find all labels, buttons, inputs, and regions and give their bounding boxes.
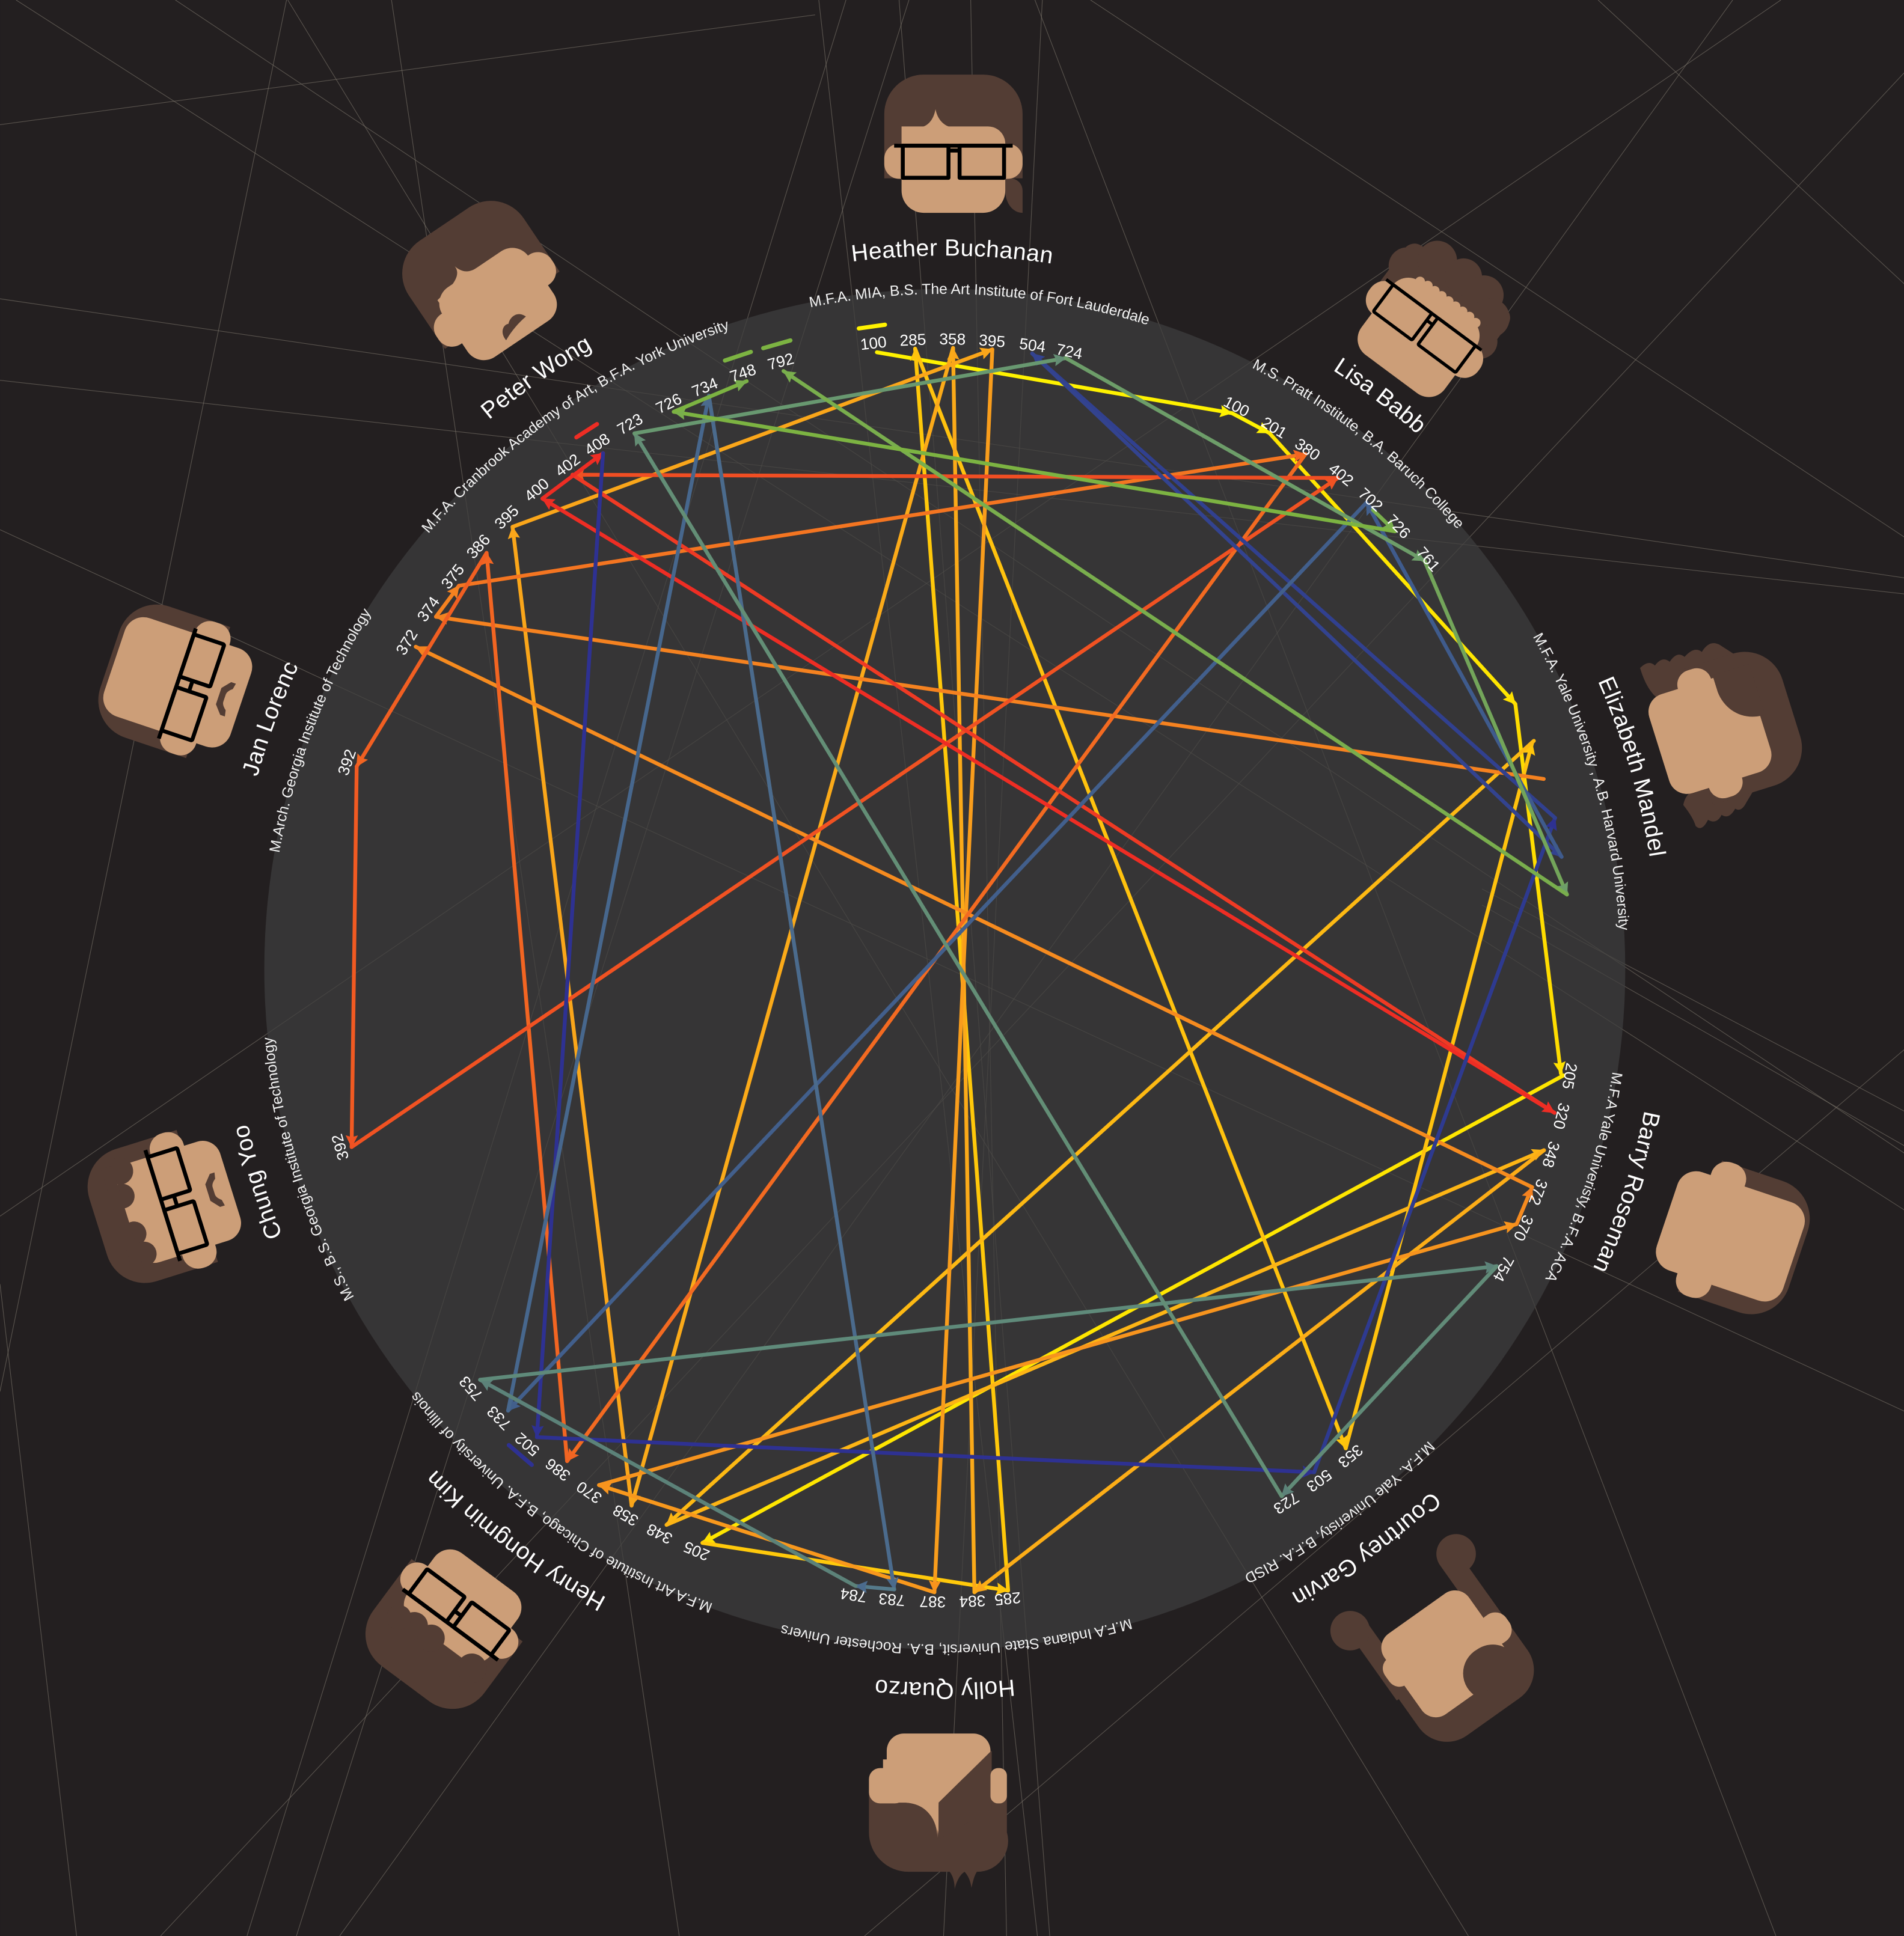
arrow: 702 to 733: [508, 502, 1367, 1411]
arrow: 392 to 402: [352, 478, 1338, 1147]
name: Jan: Jan Lorenc: [243, 662, 297, 775]
arrow: 392 to 392: [352, 766, 357, 1147]
network of course arrows: [352, 348, 1567, 1592]
dash: navy: [509, 1445, 532, 1465]
portrait: Henry Hongmin Kim: [350, 1531, 543, 1724]
arrow: 205 to 205: [702, 1075, 1564, 1543]
arrow: 374 to 375: [436, 586, 459, 617]
arrow: 358 to 395: [513, 527, 632, 1506]
arrow: 761 to 761: [1425, 561, 1567, 894]
name: Elizabeth: Elizabeth Mandel: [1599, 676, 1667, 856]
course numbers: 792: [766, 349, 796, 374]
arrow: 100 to 100: [877, 352, 1232, 413]
course numbers: 748: [727, 360, 758, 386]
arrow: 504 to 702: [1367, 502, 1562, 857]
course numbers: 784: [839, 1584, 868, 1606]
portrait: Holly Quarzo: [869, 1733, 1008, 1889]
degree: Heather: M.F.A. MIA, B.S. The Art Institute of Fort Lauderdale: [809, 283, 1149, 325]
arrow: 702 to 726: [1373, 510, 1395, 531]
course numbers: 370: [573, 1477, 605, 1507]
course numbers: 726: [1383, 511, 1414, 542]
arrow: 201 to 205: [1516, 704, 1561, 1073]
arrow: 387 to 370: [599, 1485, 934, 1592]
course numbers: 285: [994, 1589, 1021, 1609]
degree: Jan: M.Arch. Georgia Institute of Technology: [269, 608, 372, 852]
arrow: 408 to 502: [537, 453, 603, 1437]
degree: Peter: M.F.A. Cranbrook Academy of Art, B.F.A. York University: [421, 322, 727, 533]
course numbers: 100: [859, 332, 887, 353]
arrow: 370 to 370: [599, 1224, 1517, 1485]
arrow: 375 to 380: [459, 454, 1306, 586]
arrow: 370 to 372: [1517, 1187, 1532, 1224]
arrow: 761 to 792: [783, 371, 1567, 894]
course numbers: 372: [1525, 1177, 1551, 1208]
arrow: 374 to 374: [436, 617, 1544, 779]
course numbers: [328, 330, 1581, 1611]
portrait: Elizabeth Mandel: [1639, 642, 1812, 828]
course numbers: 723: [614, 410, 646, 438]
course numbers: 400: [521, 474, 553, 505]
arrow: 402 to 402: [572, 475, 1338, 478]
arrow: 726 to 748: [674, 381, 747, 412]
arrow: 784 to 753: [480, 1380, 856, 1586]
arrow: 753 to 754: [480, 1266, 1497, 1380]
degree labels: [223, 249, 1674, 1657]
arrow: 783 to 784: [856, 1586, 894, 1589]
degree: Barry: M.F.A Yale Univeristy, B.F.A. ACA: [1545, 1072, 1623, 1280]
course numbers: 348: [644, 1520, 675, 1548]
dash markers: [509, 325, 885, 1465]
portrait: Peter Wong: [387, 186, 579, 377]
course numbers: 392: [334, 747, 360, 778]
course numbers: 348: [1538, 1140, 1564, 1170]
course numbers: 734: [689, 374, 720, 400]
arrow: 380 to 386: [567, 454, 1306, 1461]
arrow: 384 to 358: [953, 348, 975, 1592]
course numbers: 384: [959, 1592, 986, 1611]
dash: green right: [764, 340, 791, 348]
portrait: Courtney Garvin: [1322, 1526, 1562, 1767]
arrow: 100 to 201: [1232, 413, 1269, 433]
arrow: 502 to 503: [537, 1437, 1314, 1472]
course numbers: 723: [1270, 1489, 1302, 1518]
arrow: 386 to 392: [357, 553, 486, 766]
name: Holly: Holly Quarzo: [875, 1678, 1014, 1700]
name: Barry: Barry Roseman: [1593, 1112, 1661, 1271]
course numbers: 402: [1325, 459, 1357, 490]
arrow: 386 to 386: [486, 553, 567, 1461]
name: Peter: Peter Wong: [480, 338, 592, 419]
course numbers: 353: [1335, 1441, 1367, 1471]
arrow: 285 to 285: [915, 349, 1008, 1590]
course numbers: 372: [392, 626, 421, 658]
arrow: 348 to 348 right: [667, 1150, 1544, 1525]
course numbers: 503: [1303, 1466, 1335, 1496]
arrow: 400 to 408: [542, 453, 603, 498]
dash: green left: [725, 352, 751, 361]
name: Courtney: Courtney Garvin: [1292, 1494, 1439, 1602]
arrow: 372 to 372: [415, 647, 1532, 1187]
degree: Lisa: M.S. Pratt Institute, B.A. Baruch College: [1253, 359, 1462, 528]
degree: Henry: M.F.A Art Institute of Chicago, B.F.A. University of Illinois: [412, 1392, 712, 1613]
degree: Holly: M.F.A Indiana State Universit, B.A. Rochester Univers: [781, 1619, 1132, 1655]
arrow: 285 to 353: [915, 349, 1345, 1449]
arrow: 504 to 504: [1032, 353, 1562, 857]
arrow: 503 to 503: [1314, 818, 1555, 1472]
course numbers: 358: [610, 1501, 641, 1530]
arrow: 358 to 358: [632, 348, 953, 1506]
course numbers: 395: [978, 331, 1006, 351]
course numbers: 387: [919, 1592, 946, 1611]
arrow: 402 to 320: [572, 475, 1555, 1113]
course numbers: 761: [1413, 543, 1443, 575]
degree: Elizabeth: M.F.A. Yale University , A.B. Harvard University: [1533, 632, 1629, 930]
course numbers: 380: [1291, 435, 1323, 464]
arrow: 723 to 723: [634, 433, 1282, 1496]
course numbers: 358: [939, 330, 966, 348]
course numbers: 724: [1055, 340, 1084, 363]
course numbers: 504: [1018, 334, 1047, 356]
course numbers: 754: [1489, 1253, 1517, 1284]
dash: yellow: [859, 325, 885, 328]
name: Henry: Henry Hongmin Kim: [429, 1470, 605, 1611]
course numbers: 702: [1355, 484, 1386, 515]
arrow: 395 to 395: [513, 349, 993, 527]
course numbers: 386: [463, 531, 494, 562]
course numbers: 375: [438, 561, 468, 593]
portrait: Heather Buchanan: [884, 75, 1023, 213]
arrow: 353 to 353: [1345, 743, 1532, 1449]
course numbers: 205: [681, 1538, 712, 1565]
name: Lisa: Lisa Babb: [1334, 358, 1424, 432]
arrow: 201 to 201: [1269, 433, 1516, 704]
degree: Courtney: M.F.A. Yale Univeristy, B.F.A. RISD: [1246, 1441, 1435, 1582]
portrait: Barry Roseman: [1645, 1149, 1820, 1326]
course numbers: 783: [878, 1590, 906, 1610]
course numbers: 726: [653, 389, 685, 417]
arrow: 733 to 734: [508, 395, 709, 1411]
portrait: Chung Yoo: [77, 1119, 251, 1294]
arrow: 348 to 348 lower: [667, 741, 1534, 1525]
course numbers: 408: [581, 430, 613, 459]
central circle panel: [265, 289, 1625, 1649]
arrow: 726 to 726: [674, 412, 1395, 531]
course numbers: 392: [328, 1132, 352, 1162]
dash: red: [577, 424, 597, 438]
arrow: 205 to 285: [702, 1543, 1008, 1590]
course numbers: 733: [483, 1402, 515, 1434]
arrow: 395 to 387: [934, 349, 993, 1592]
course numbers: 201: [1258, 413, 1290, 442]
degree: Chung: M.S., B.S. Georgia Institute of Technology: [265, 1037, 354, 1301]
names: [225, 234, 1676, 1703]
course numbers: 205: [1559, 1061, 1581, 1090]
course numbers: 100: [1220, 392, 1252, 421]
arrow: 754 to 723: [1282, 1266, 1497, 1496]
arrow: 734 to 783: [709, 395, 894, 1589]
course numbers: 374: [414, 593, 443, 625]
course numbers: 386: [542, 1455, 574, 1485]
course numbers: 502: [511, 1429, 543, 1460]
arrow: 723 to 724: [634, 358, 1066, 433]
arrow: 320 to 400: [542, 498, 1555, 1113]
arrow: 724 to 761: [1066, 358, 1425, 561]
portrait: Jan Lorenc: [88, 594, 263, 769]
course numbers: 370: [1510, 1212, 1537, 1244]
course numbers: 285: [899, 330, 926, 350]
name: Heather: Heather Buchanan: [853, 239, 1052, 263]
arrow: 348 to 384: [975, 1150, 1544, 1592]
course numbers: 395: [491, 501, 522, 533]
name: Chung: Chung Yoo: [237, 1126, 280, 1238]
course numbers: 402: [552, 450, 584, 480]
arrow: 503 to 504: [1032, 353, 1555, 818]
portrait: Lisa Babb: [1335, 220, 1530, 415]
course numbers: 753: [455, 1373, 486, 1404]
course numbers: 320: [1550, 1101, 1573, 1131]
